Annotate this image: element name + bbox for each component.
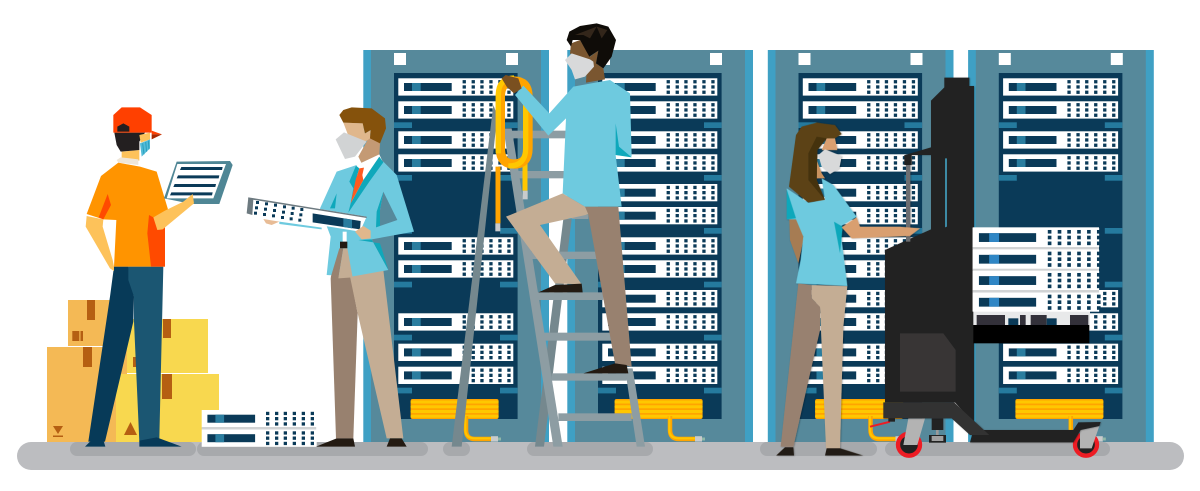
right arm	[153, 194, 194, 230]
belt and shirt opening	[343, 232, 347, 242]
rack 1	[363, 50, 549, 442]
shirt collar	[352, 154, 383, 203]
cardboard boxes	[47, 300, 219, 442]
forearm and hand	[842, 217, 920, 238]
tablet	[164, 161, 233, 204]
teal shirt	[787, 178, 857, 286]
rear arm	[789, 219, 803, 263]
ladder with cable and climbing technician	[452, 23, 645, 447]
server lift trolley	[870, 78, 1101, 456]
ladder	[452, 105, 645, 447]
front leg	[506, 193, 588, 284]
stacked servers on floor	[202, 410, 317, 447]
held server unit	[247, 197, 371, 239]
neck and face	[358, 135, 380, 163]
head with cap and mask	[113, 107, 162, 165]
trousers	[316, 248, 407, 447]
floor	[17, 442, 1184, 470]
yellow cable coil	[495, 78, 528, 231]
technician in teal top operating lift	[776, 123, 920, 456]
hair	[339, 107, 386, 143]
lapels	[348, 157, 383, 213]
lift fork	[973, 311, 1090, 343]
gap under arm	[380, 192, 397, 226]
rack 4	[968, 50, 1154, 442]
rack 2	[567, 50, 753, 442]
trousers seen in jacket opening	[331, 248, 343, 278]
jacket	[320, 162, 414, 277]
orange shirt	[87, 163, 168, 267]
hand	[502, 75, 522, 93]
upper body and head	[320, 107, 414, 278]
back leg	[585, 207, 632, 367]
wheels and casters	[870, 418, 1099, 456]
jacket shading	[330, 192, 388, 270]
trousers	[85, 267, 182, 447]
surgical mask	[336, 132, 367, 159]
server stack on lift	[973, 227, 1101, 312]
head with mask and hair	[565, 23, 616, 83]
trousers	[776, 283, 863, 456]
shoes	[538, 284, 628, 373]
left arm	[86, 216, 114, 271]
rack 3	[768, 50, 954, 442]
blue shirt	[515, 80, 632, 207]
technician in jacket holding server	[247, 107, 414, 447]
tie	[351, 168, 364, 203]
delivery man holding tablet	[85, 107, 233, 447]
lift mast and body	[883, 78, 1101, 442]
floor footprints	[70, 442, 1110, 456]
head with hair and mask	[789, 123, 842, 203]
